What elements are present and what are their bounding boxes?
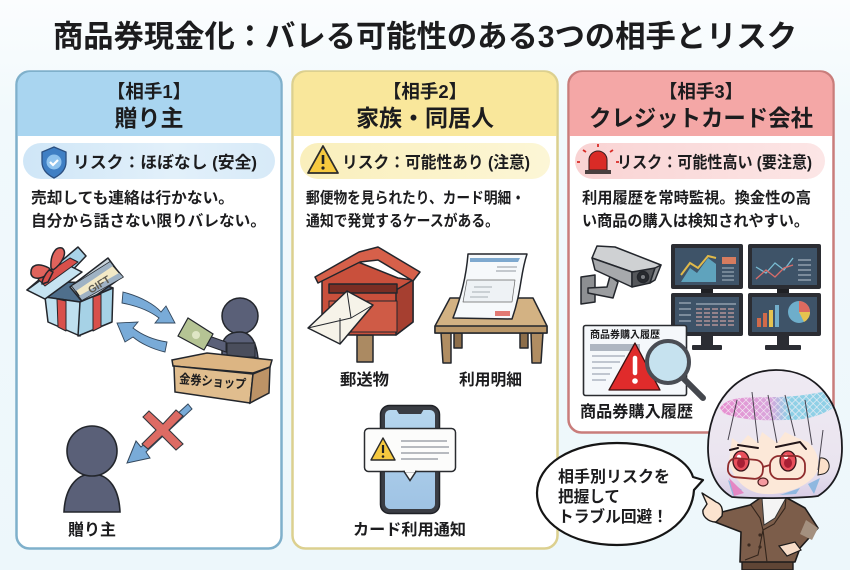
heading: recipient 2: 【相手2】 [383,81,467,102]
body text: 自分から話さない限りバレない。 [31,212,266,230]
heading: recipient 3 [589,81,813,131]
icon: giver silhouette [64,426,120,512]
body text: 通知で発覚するケースがある。 [306,211,499,230]
heading: recipient 1 [107,81,191,131]
icon: statement on desk [435,254,547,363]
heading: recipient 2: 家族・同居人 [356,105,494,131]
body text: 利用履歴を常時監視。換金性の高 [582,188,811,207]
monitor: bar and pie chart [748,293,821,350]
monitor: line chart [748,244,821,293]
risk pill: almost none: リスク：ほぼなし (安全) [73,152,257,172]
heading: recipient 1: 贈り主 [114,105,184,131]
label: giver: 贈り主 [68,520,116,539]
monitor: data table [671,293,743,350]
label: mail: 郵送物 [340,371,389,389]
risk pill: almost none [23,143,275,179]
risk pill: high: リスク：可能性高い (要注意) [617,152,812,172]
icon: crossed arrow to giver [127,404,192,463]
body text: 郵便物を見られたり、カード明細・ [306,189,525,207]
heading: recipient 3: クレジットカード会社 [589,105,813,131]
monitor: area chart [671,244,743,293]
label: purchase history: 商品券購入履歴 [580,403,693,421]
label: card notification: カード利用通知 [353,520,466,539]
risk pill: possible: リスク：可能性あり (注意) [342,152,530,172]
character: glasses girl in suit [537,370,842,570]
icon: phone with notification [364,406,456,514]
arrow: to shop [122,292,175,323]
body text: い商品の購入は検知されやすい。 [582,211,809,230]
panel: recipient 2 family [292,72,558,548]
body text [31,188,266,230]
body text [582,188,811,230]
icon: purchase history document with warning and magnifier [584,326,703,398]
icon: security camera [581,246,661,304]
icon: gift box with ticket [27,247,123,336]
document title: 商品券購入履歴 [590,328,660,341]
panel: recipient 3 credit card company [568,72,834,432]
heading: recipient 3: 【相手3】 [659,81,743,102]
heading: recipient 1: 【相手1】 [107,81,191,102]
speech bubble [537,443,703,545]
icon: gift box with ticket: GIFT [86,273,113,296]
speech bubble: トラブル回避！ [558,507,668,526]
panel: recipient 1 giver [16,72,282,548]
label: statement: 利用明細 [459,371,522,389]
icon: mailbox with envelope [308,247,420,362]
heading: recipient 2 [356,81,494,131]
speech bubble: 把握して [558,487,620,506]
risk pill: high [575,143,825,179]
shop sign label: 金券ショップ [179,371,247,392]
body text: 売却しても連絡は行かない。 [31,188,234,207]
body text [306,189,525,230]
speech bubble: 相手別リスクを [558,467,670,486]
title: 商品券現金化：バレる可能性のある3つの相手とリスク [53,20,797,54]
risk pill: possible [300,143,550,179]
icon: shop clerk with cash and counter [172,298,272,403]
arrow: back to gift [117,322,167,352]
icon: monitors with charts [671,244,821,350]
